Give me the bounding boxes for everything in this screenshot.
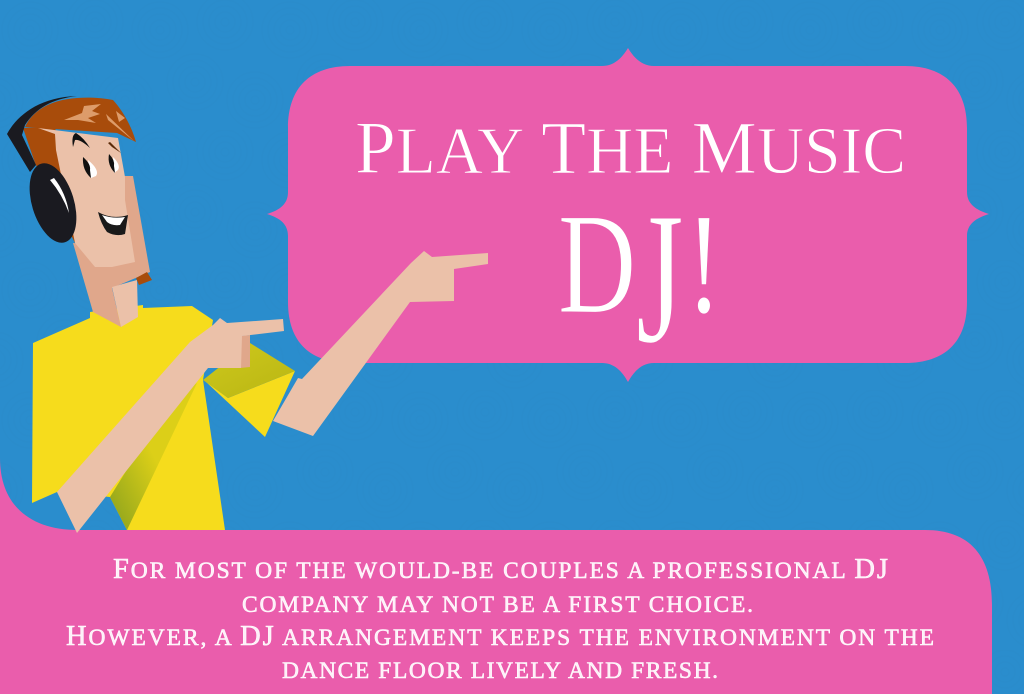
description text: FOR MOST OF THE WOULD-BE COUPLES A PROFESSIONAL DJ [113,554,888,585]
description text: HOWEVER, A DJ ARRANGEMENT KEEPS THE ENVIRONMENT ON THE [66,621,934,652]
front arm and hand [57,318,284,533]
title: DJ! [558,174,722,383]
hair side [23,127,82,243]
description text [66,554,934,684]
title: Play The Music: PLAY THE MUSIC [355,107,906,190]
t-shirt shadow [110,383,197,530]
eyes and brows [72,133,121,178]
title: DJ!: J [636,174,684,383]
title: DJ!: ! [686,184,722,344]
description text: DANCE FLOOR LIVELY AND FRESH. [282,658,718,684]
t-shirt sleeve [203,343,295,437]
face [38,128,150,272]
goatee [136,272,152,285]
character: DJ pointing [7,96,488,533]
mouth [98,212,128,235]
description text: COMPANY MAY NOT BE A FIRST CHOICE. [242,592,753,618]
panel: title plaque [267,48,989,382]
panel: bottom description band [0,458,992,694]
t-shirt body [32,305,225,530]
headphones [7,96,85,248]
title: DJ!: D [558,185,636,344]
neck [73,243,150,327]
hair top [25,98,136,142]
back arm [273,251,488,436]
